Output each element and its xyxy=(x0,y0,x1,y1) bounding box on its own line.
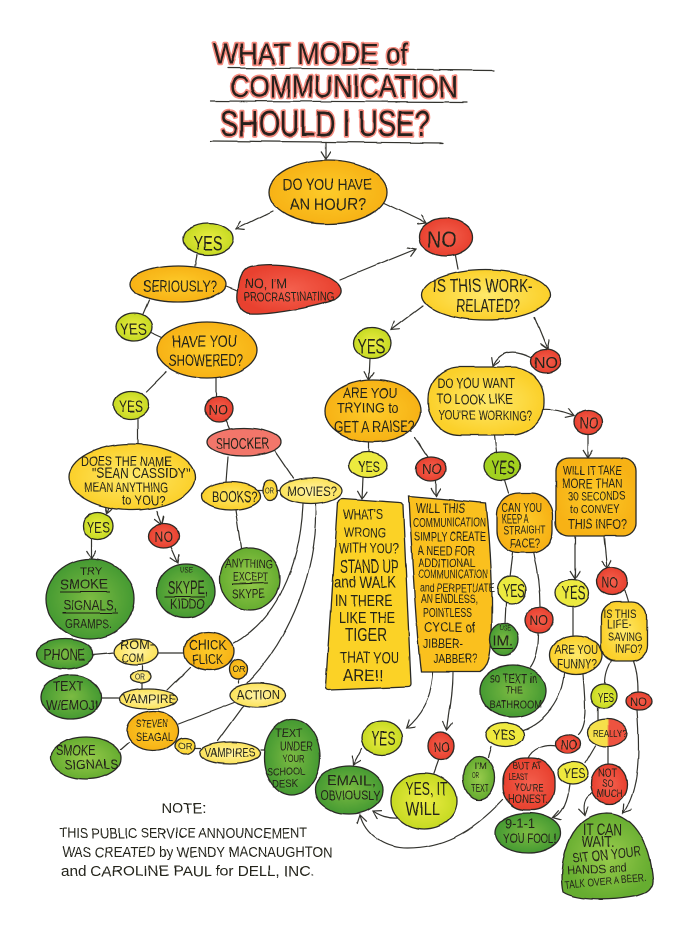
node: keep a straight face: CAN YOU xyxy=(502,500,542,515)
node: yes it will: YES, IT xyxy=(406,779,448,799)
node: email obviously: EMAIL, xyxy=(327,772,376,788)
node: yes: YES xyxy=(120,320,147,339)
panel: will this communication: WILL THIS xyxy=(416,500,465,517)
node: have you showered: HAVE YOU xyxy=(172,332,237,351)
connector: funny to yes xyxy=(523,673,564,730)
panel: what's wrong with you: IN THERE xyxy=(335,593,392,610)
arrow: sean to yes xyxy=(107,504,110,513)
node: are you funny: FUNNY? xyxy=(557,656,597,671)
node: action: ACTION xyxy=(237,687,280,702)
node: no xyxy=(149,524,179,548)
arrow: yes it will to email xyxy=(373,811,398,818)
connector: no to honest xyxy=(528,746,557,759)
node: it can wait: WAIT. xyxy=(582,834,614,851)
node: not so much xyxy=(591,764,627,804)
node: text under your school desk xyxy=(264,719,320,795)
arrow: no to it can wait xyxy=(623,710,639,813)
node: yes: YES xyxy=(503,581,525,601)
node: yes xyxy=(591,684,617,708)
connector: yes to straight face xyxy=(505,480,509,493)
node: try smoke signals gramps xyxy=(46,559,134,639)
node: yes xyxy=(349,452,387,478)
node: but at least you're honest: BUT AT xyxy=(513,761,542,772)
node: or xyxy=(175,738,195,754)
node: vampire xyxy=(119,689,177,709)
arrow: yes to smoke signals xyxy=(91,540,93,559)
node: seriously xyxy=(130,266,226,302)
node: is this work-related: IS THIS WORK- xyxy=(433,276,533,296)
node: yes: YES xyxy=(493,727,515,744)
node: no: NO xyxy=(434,739,450,755)
node: more than 30 seconds: to CONVEY xyxy=(570,502,620,516)
arrow: no to look like working xyxy=(493,352,531,366)
node: more than 30 seconds: THIS INFO? xyxy=(568,516,627,533)
node: text under your school desk: YOUR xyxy=(283,753,305,765)
node: procrastinating: PROCRASTINATING xyxy=(244,289,334,304)
node: no: NO xyxy=(561,737,577,752)
arrow: not so much to it can wait xyxy=(584,793,592,815)
node: anything except skype: SKYPE xyxy=(232,586,265,601)
node: use skype kiddo: KIDDO xyxy=(170,596,205,613)
node: procrastinating xyxy=(237,265,341,314)
node: it can wait: HANDS and xyxy=(566,860,627,878)
node: no xyxy=(531,349,561,373)
node: more than 30 seconds: WILL IT TAKE xyxy=(563,463,622,478)
node: no xyxy=(574,410,602,434)
node: look like you're working xyxy=(428,367,544,435)
panel: what's wrong with you: and WALK xyxy=(334,573,397,592)
node: yes: YES xyxy=(562,583,586,603)
node: IM or text: TEXT xyxy=(471,783,489,795)
node: or: OR xyxy=(178,741,193,751)
connector: or to vampires xyxy=(195,747,201,749)
node: text w/emoji xyxy=(41,675,101,719)
node: yes xyxy=(353,328,391,358)
node: rom-com: COM xyxy=(122,651,144,665)
connector: yes to showered xyxy=(150,332,163,338)
node: trying to get a raise: GET A RAISE? xyxy=(334,419,415,436)
arrow: hour to yes xyxy=(236,211,273,229)
node: yes: YES xyxy=(87,520,110,537)
connector: life-saving to no xyxy=(633,660,638,692)
title: WHAT MODE of xyxy=(213,38,409,71)
connector: phone to rom-com xyxy=(93,653,114,655)
node: text in the bathroom: so TEXT in xyxy=(490,670,537,686)
node: books: BOOKS? xyxy=(212,489,257,506)
node: do you have an hour xyxy=(269,160,387,224)
node: yes xyxy=(498,576,526,604)
node: try smoke signals gramps: SIGNALS, xyxy=(63,597,117,614)
panel: what's wrong with you: WRONG xyxy=(344,524,386,540)
panel: what's wrong with you: LIKE THE xyxy=(339,610,395,627)
node: 9-1-1 you fool: 9-1-1 xyxy=(505,815,535,831)
connector: yes to seriously xyxy=(195,255,197,266)
node: yes: YES xyxy=(357,336,385,358)
node: have you showered xyxy=(157,322,257,378)
node: or xyxy=(263,480,277,500)
node: really xyxy=(587,719,627,747)
connector: working to yes xyxy=(495,435,497,452)
arrow: honest to email xyxy=(360,800,503,848)
panel: what's wrong with you: WHAT'S xyxy=(343,506,383,522)
node: sean cassidy: "SEAN CASSIDY" xyxy=(92,465,190,482)
connectors xyxy=(92,142,639,848)
node: are you funny xyxy=(550,636,602,674)
node: yes: YES xyxy=(358,459,380,476)
node: yes xyxy=(113,391,149,419)
connector: action to vampires xyxy=(218,704,245,741)
node: sean cassidy: to YOU? xyxy=(122,492,165,508)
connector: movies to chick flick xyxy=(234,504,303,643)
node: yes it will: WILL xyxy=(406,799,440,819)
node: text under your school desk: TEXT xyxy=(275,726,303,740)
panel: will this communication: ADDITIONAL xyxy=(418,556,475,570)
node: email obviously xyxy=(315,766,383,814)
node: yes xyxy=(83,512,113,540)
node: look like you're working: YOU'RE WORKING? xyxy=(438,407,532,423)
node: keep a straight face: STRAIGHT xyxy=(503,523,546,537)
node: more than 30 seconds: 30 SECONDS xyxy=(568,489,626,503)
node: yes: YES xyxy=(193,233,222,255)
node: or xyxy=(131,671,151,683)
arrow: work to yes xyxy=(391,306,423,330)
node: no: NO xyxy=(530,612,548,629)
node: keep a straight face xyxy=(497,493,553,553)
node: anything except skype: ANYTHING xyxy=(225,557,273,571)
node: anything except skype: EXCEPT xyxy=(233,570,268,584)
node: use IM: IM. xyxy=(493,632,513,649)
node: shocker: SHOCKER xyxy=(216,434,269,453)
connector: rom-com to chick flick xyxy=(157,652,184,654)
node: no xyxy=(597,567,627,595)
node: IM or text: I'M xyxy=(474,761,487,772)
connector: shocker to movies xyxy=(274,450,293,478)
node: smoke signals xyxy=(51,737,121,779)
node: sean cassidy xyxy=(69,444,195,510)
node: is this life-saving info: SAVING xyxy=(608,630,642,644)
node: or: OR xyxy=(135,673,145,682)
arrow: will this to no xyxy=(447,673,453,730)
connector: yes to im or text xyxy=(488,747,491,757)
arrow: no to 30 seconds xyxy=(587,434,589,458)
node: text under your school desk: UNDER xyxy=(280,739,313,753)
panel: will this communication: and PERPETUATE xyxy=(420,581,495,595)
node: try smoke signals gramps: TRY xyxy=(80,566,104,578)
node: no: NO xyxy=(208,402,228,419)
panel: will this communication: POINTLESS xyxy=(423,605,472,620)
node: chick flick: CHICK xyxy=(189,637,227,654)
node: more than 30 seconds xyxy=(556,458,636,536)
note: THIS PUBLIC SERVICE ANNOUNCEMENT xyxy=(59,825,307,842)
node: is this life-saving info xyxy=(601,602,647,661)
connector: seagal to smoke signals xyxy=(121,743,129,750)
connector: yes to really xyxy=(597,708,599,720)
node: keep a straight face: FACE? xyxy=(510,536,540,551)
node: try smoke signals gramps: GRAMPS. xyxy=(65,616,112,631)
node: chick flick xyxy=(184,632,234,670)
node: or: OR xyxy=(232,664,245,674)
title: COMMUNICATION xyxy=(230,69,458,104)
node: shocker xyxy=(207,428,281,456)
node: more than 30 seconds: MORE THAN xyxy=(562,476,623,491)
arrow: hour to no xyxy=(384,203,426,223)
arrow: yes to what's wrong xyxy=(362,478,363,499)
node: text in the bathroom xyxy=(480,665,546,717)
note: and CAROLINE PAUL for DELL, INC. xyxy=(61,863,315,880)
connector: yes to funny xyxy=(572,606,574,637)
node: phone: PHONE xyxy=(44,647,85,664)
node: movies: MOVIES? xyxy=(287,483,337,499)
node: but at least you're honest: HONEST. xyxy=(508,792,548,806)
node: no: NO xyxy=(534,355,558,372)
node: smoke signals: SMOKE xyxy=(56,742,96,759)
node: text w/emoji: TEXT xyxy=(53,678,83,694)
connector: life-saving to yes xyxy=(605,658,613,684)
node: yes: YES xyxy=(492,458,515,479)
arrow: will this to yes xyxy=(406,673,433,728)
node: trying to get a raise xyxy=(325,380,421,442)
node: no xyxy=(525,607,553,633)
connector: really to yes xyxy=(585,746,595,763)
connector: straight face to yes xyxy=(510,553,513,577)
connector: no to yes it will xyxy=(434,759,439,773)
panel: will this communication: COMMUNICATION xyxy=(418,567,488,581)
arrow: sean to no xyxy=(157,511,162,525)
node: seriously: SERIOUSLY? xyxy=(143,277,217,296)
node: yes xyxy=(484,452,520,480)
connector: vampire to chick flick xyxy=(167,667,190,690)
connector: vampires to text under desk xyxy=(261,749,267,751)
node: IM or text: OR xyxy=(472,771,479,780)
note xyxy=(59,800,332,880)
node: no xyxy=(416,457,446,481)
connector: no to work-related xyxy=(455,253,458,269)
connector: funny to no xyxy=(578,674,585,735)
node: not so much: SO xyxy=(602,778,613,790)
panel: what's wrong with you xyxy=(326,499,411,690)
arrow: yes to 911 xyxy=(553,784,570,818)
panel: what's wrong with you: STAND UP xyxy=(340,557,399,578)
node: smoke signals: SIGNALS xyxy=(65,756,118,772)
node: is this life-saving info: LIFE- xyxy=(607,617,632,631)
arrow: no to skype xyxy=(171,547,178,563)
node: or: OR xyxy=(265,486,274,495)
node: look like you're working: TO LOOK LIKE xyxy=(436,391,513,408)
panel: what's wrong with you: TIGER xyxy=(345,625,387,645)
connector: no to life-saving xyxy=(625,590,629,603)
connector: text to vampire xyxy=(101,697,118,699)
node: rom-com: ROM- xyxy=(120,637,154,652)
panel: will this communication: AN ENDLESS, xyxy=(421,591,478,606)
panel: will this communication: JABBER? xyxy=(434,651,477,666)
node: is this work-related xyxy=(422,270,550,320)
connector: books to or to movies xyxy=(258,489,282,491)
node: yes xyxy=(486,723,524,747)
node: anything except skype xyxy=(220,548,280,610)
node: text under your school desk: DESK xyxy=(272,778,299,790)
node: steven seagal xyxy=(127,711,179,751)
node: no: NO xyxy=(422,461,442,478)
connector: raise to no xyxy=(415,437,428,457)
connector: or to action xyxy=(238,678,240,683)
node: not so much: MUCH xyxy=(597,788,622,800)
connector: yes to IM xyxy=(505,603,506,623)
panel: will this communication: CYCLE of xyxy=(424,619,475,635)
arrow: no to will this xyxy=(435,481,437,496)
arrow: 30 seconds to yes xyxy=(574,535,576,579)
connector: yes to Sean Cassidy xyxy=(137,419,139,445)
node: sean cassidy: DOES THE NAME xyxy=(81,453,172,469)
node: yes: YES xyxy=(598,690,614,705)
node: chick flick: FLICK xyxy=(192,651,224,667)
node: not so much: NOT xyxy=(598,766,617,780)
node: try smoke signals gramps: SMOKE xyxy=(60,576,108,592)
node: yes xyxy=(116,313,152,341)
node: 9-1-1 you fool: YOU FOOL! xyxy=(503,830,557,846)
node: use IM: USE xyxy=(500,625,511,632)
connector: really to not so much xyxy=(607,747,609,764)
connector: seriously to yes xyxy=(143,300,149,314)
arrow: title to first question xyxy=(325,142,327,159)
connector: rom-com to vampire xyxy=(141,665,143,689)
node: rom-com xyxy=(114,637,158,665)
panel: will this communication: SIMPLY CREATE xyxy=(414,529,486,544)
node: phone xyxy=(37,639,93,669)
node: yes: YES xyxy=(119,397,143,416)
node: use skype kiddo: USE xyxy=(180,567,193,574)
note: WAS CREATED by WENDY MACNAUGHTON xyxy=(62,844,332,861)
node: no xyxy=(556,735,580,753)
node: trying to get a raise: TRYING to xyxy=(337,400,399,417)
connector: no to text in bathroom xyxy=(530,633,538,667)
arrow: working to no xyxy=(541,410,574,416)
node: steven seagal: STEVEN xyxy=(136,718,168,730)
connector: shocker to books xyxy=(226,457,228,482)
node: is this life-saving info: INFO? xyxy=(615,642,642,656)
connector: straight face to no xyxy=(533,552,540,607)
connector: books to anything except skype xyxy=(236,510,242,552)
arrow: work to no xyxy=(535,317,548,349)
node: no xyxy=(626,692,652,710)
node: movies xyxy=(280,478,342,504)
node: it can wait: IT CAN xyxy=(583,820,622,839)
node: no: NO xyxy=(630,695,647,709)
node: 9-1-1 you fool xyxy=(495,813,561,853)
node: yes xyxy=(362,721,402,755)
node: but at least you're honest xyxy=(503,758,555,810)
node: have you showered: SHOWERED? xyxy=(169,351,243,370)
node: trying to get a raise: ARE YOU xyxy=(343,385,397,402)
panel: what's wrong with you: THAT YOU xyxy=(340,650,399,667)
node: yes: YES xyxy=(371,729,395,750)
node: text in the bathroom: THE xyxy=(505,685,523,697)
node: yes xyxy=(558,762,588,784)
node: no xyxy=(205,396,233,422)
node: yes: YES xyxy=(564,765,585,781)
node: text under your school desk: SCHOOL xyxy=(267,766,305,778)
node: no: NO xyxy=(579,415,598,432)
panel: what's wrong with you: ARE!! xyxy=(343,666,383,685)
connector: seriously to procrastinating xyxy=(226,286,239,291)
node: is this work-related: RELATED? xyxy=(456,296,520,316)
title xyxy=(210,38,494,144)
panel: will this communication: COMMUNICATION xyxy=(413,515,486,530)
node: it can wait: TALK OVER A BEER. xyxy=(564,871,647,892)
arrow: procrastinating to no xyxy=(340,249,416,280)
node: sean cassidy: MEAN ANYTHING xyxy=(84,479,168,495)
node: it can wait xyxy=(562,813,653,899)
connector: movies to action xyxy=(247,504,316,683)
node: but at least you're honest: LEAST xyxy=(508,772,528,783)
node: use skype kiddo: SKYPE, xyxy=(168,578,208,599)
node: steven seagal: SEAGAL xyxy=(136,730,173,744)
node: look like you're working: DO YOU WANT xyxy=(437,375,515,392)
node: no: NO xyxy=(427,227,457,252)
node: use skype kiddo xyxy=(157,564,215,618)
arrow: yes to email xyxy=(353,748,362,765)
node: procrastinating: NO, I'M xyxy=(245,276,287,291)
connector: showered to no xyxy=(215,378,217,397)
node: it can wait: SIT ON YOUR xyxy=(572,843,642,866)
node: action xyxy=(230,683,286,707)
node: no xyxy=(428,732,454,760)
node: or xyxy=(229,659,247,679)
node: email obviously: OBVIOUSLY. xyxy=(320,787,382,803)
connector: showered to yes xyxy=(146,372,166,392)
title: SHOULD I USE? xyxy=(220,103,430,144)
node: vampires xyxy=(200,742,260,764)
panel: will this communication: A NEED FOR xyxy=(418,543,475,558)
connector: raise to yes xyxy=(368,442,370,452)
connector: no to shocker xyxy=(226,421,230,430)
node: no xyxy=(419,218,473,256)
node: no: NO xyxy=(155,529,173,546)
node: do you have an hour: AN HOUR? xyxy=(289,195,366,214)
node: vampires: VAMPIRES xyxy=(205,745,255,760)
arrow: 30 seconds to no xyxy=(604,537,607,568)
panel: will this communication: JIBBER- xyxy=(423,636,463,651)
node: do you have an hour: DO YOU HAVE xyxy=(283,177,372,194)
node: really: REALLY? xyxy=(593,729,627,740)
node: yes it will xyxy=(391,773,457,829)
node: use IM xyxy=(490,623,518,655)
connector: action to steven seagal xyxy=(179,701,238,724)
node: IM or text xyxy=(463,756,495,800)
node: text w/emoji: W/EMOJI xyxy=(46,697,98,713)
panel: what's wrong with you: WITH YOU? xyxy=(339,540,399,557)
node: yes xyxy=(183,223,233,255)
node: vampire: VAMPIRE xyxy=(123,692,176,706)
node: are you funny: ARE YOU xyxy=(555,642,598,657)
node: no: NO xyxy=(602,575,618,592)
arrow: yes to raise xyxy=(369,358,370,380)
node: text in the bathroom: BATHROOM xyxy=(489,699,542,711)
panel: will this communication xyxy=(409,496,495,672)
node: is this life-saving info: IS THIS xyxy=(603,607,637,621)
node: keep a straight face: KEEP A xyxy=(502,511,528,526)
node: yes xyxy=(555,580,589,606)
node: books xyxy=(202,482,260,510)
node: but at least you're honest: YOU'RE xyxy=(514,782,543,794)
note: NOTE: xyxy=(161,800,206,817)
